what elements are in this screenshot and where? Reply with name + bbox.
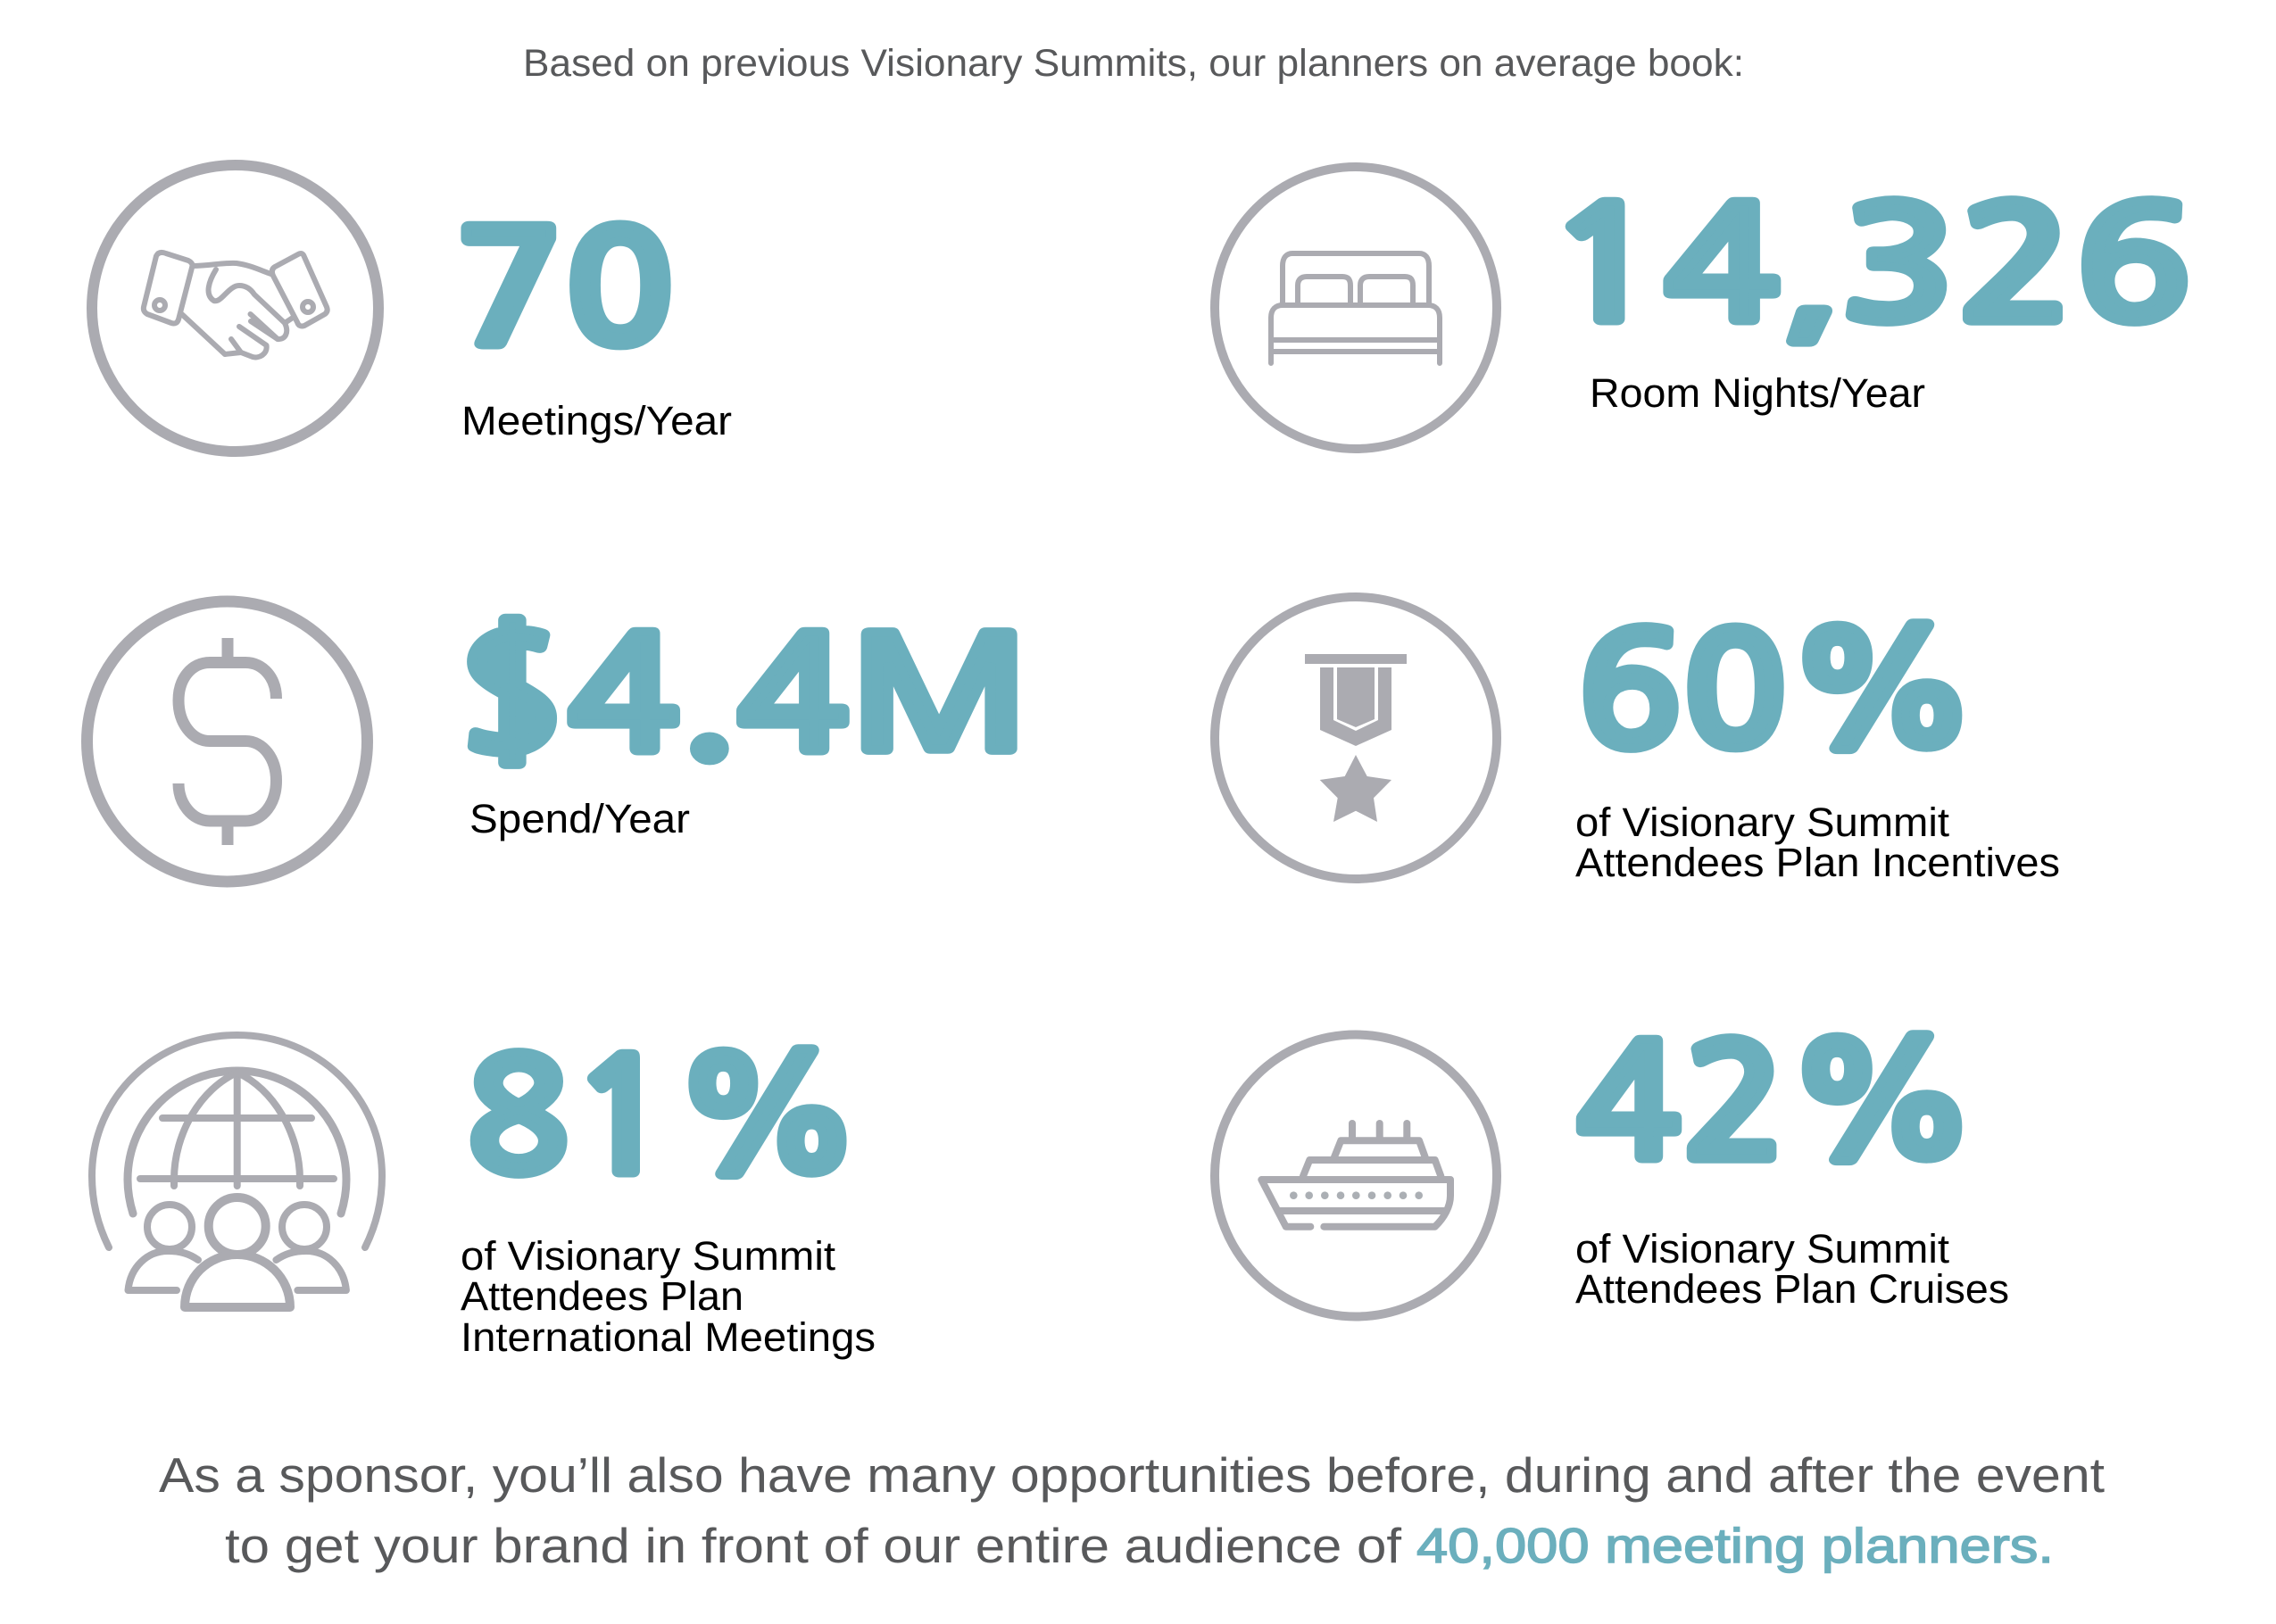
heading: intro sentence: Based on previous Visionary Summits, our planners on average book:: [523, 42, 1744, 85]
panel: incentives: [1215, 597, 2060, 885]
label: cruises text: of Visionary Summit: [1575, 1226, 1950, 1272]
label: incentives text: [1575, 800, 2060, 885]
icon: cruise ship in circle: [1215, 1035, 1497, 1317]
stat: 42%: 42%: [1576, 1027, 1977, 1182]
icon: medal in circle: [1215, 597, 1497, 879]
panel: cruises: [1215, 1027, 2009, 1317]
label: incentives text: of Visionary Summit: [1575, 800, 1950, 845]
stat: $4.4M: $4.4M: [454, 618, 1030, 775]
closing text block: As a sponsor, you’ll also have many opportunities before, during and after the event: [159, 1447, 2105, 1503]
closing text block: [159, 1447, 2105, 1573]
label: spend/year: Spend/Year: [469, 796, 690, 841]
stat: 70: 70: [454, 213, 675, 369]
panel: international meetings: [92, 1035, 876, 1360]
icon: bed in circle: [1215, 167, 1497, 449]
stat: 14,326: 14,326: [1546, 189, 2192, 344]
icon: handshake in circle: [92, 165, 378, 452]
panel: meetings per year: [92, 165, 732, 452]
label: meetings/year: Meetings/Year: [461, 398, 732, 443]
label: international meetings text: [461, 1233, 876, 1360]
label: international meetings text: Attendees Plan: [461, 1273, 743, 1319]
label: international meetings text: International Meetings: [461, 1314, 876, 1360]
panel: room nights per year: [1215, 167, 2192, 449]
stat: 81%: 81%: [466, 1041, 861, 1197]
label: room nights/year: Room Nights/Year: [1590, 370, 1925, 416]
label: cruises text: [1575, 1226, 2009, 1312]
label: cruises text: Attendees Plan Cruises: [1575, 1266, 2009, 1312]
closing text block: to get your brand in front of our entire audience of: [225, 1518, 1402, 1573]
stat: 60%: 60%: [1577, 616, 1977, 771]
label: incentives text: Attendees Plan Incentives: [1575, 840, 2060, 885]
label: international meetings text: of Visionary Summit: [461, 1233, 836, 1279]
icon: globe with people: [92, 1035, 382, 1307]
highlight: 40,000 meeting planners: 40,000 meeting planners.: [1416, 1518, 2054, 1573]
icon: dollar sign in circle: [87, 601, 368, 882]
panel: spend per year: [87, 601, 1030, 882]
